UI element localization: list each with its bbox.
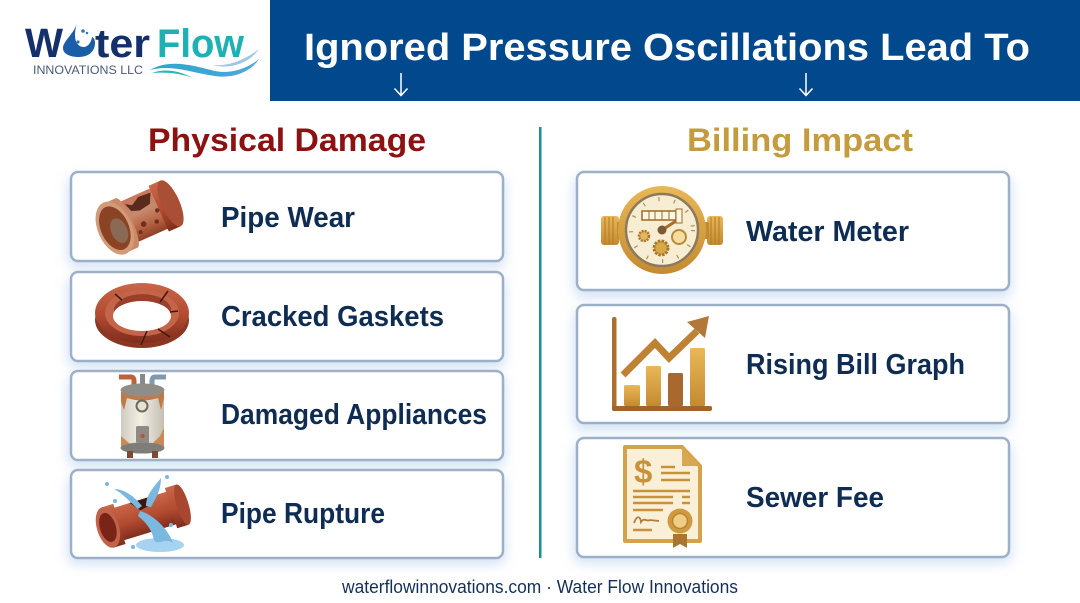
label: Rising Bill Graph: Rising Bill Graph [746,349,965,381]
header banner [270,0,1080,101]
footer: waterflowinnovations.com · Water Flow Innovations [341,577,738,597]
heading: Physical Damage: Physical Damage [148,122,426,158]
logo: Water Flow Innovations LLC [25,20,259,78]
card: Rising Bill Graph [574,305,1011,430]
panel: billing impact [574,172,1011,563]
card: Pipe Rupture [68,470,505,564]
logo: Water Flow Innovations LLC: Flow [157,22,245,66]
logo waves [150,49,259,78]
icon: sewer fee document [625,447,700,548]
label: Sewer Fee: Sewer Fee [746,482,884,514]
arrow: to billing impact [800,73,812,96]
label: Damaged Appliances: Damaged Appliances [221,399,487,431]
panel: physical damage [68,172,505,564]
card: Water Meter [574,172,1011,297]
title: Ignored Pressure Oscillations Lead To [304,27,1030,69]
label: Pipe Rupture: Pipe Rupture [221,498,385,530]
card: Damaged Appliances [68,371,505,466]
card: Pipe Wear [68,172,505,267]
card: Cracked Gaskets [68,272,505,367]
card: Sewer Fee [574,438,1011,563]
icon: cracked gasket [95,283,189,348]
heading: Billing Impact: Billing Impact [687,122,913,158]
icon: sewer fee document: $ [634,453,652,490]
icon: water meter [601,186,723,274]
arrow: to physical damage [394,73,408,96]
icon: corroded pipe [88,174,190,261]
icon: rising bar graph [612,316,712,411]
label: Pipe Wear: Pipe Wear [221,202,355,234]
center divider [539,127,542,558]
logo: Water Flow Innovations LLC: W [25,20,63,66]
label: Cracked Gaskets: Cracked Gaskets [221,301,444,333]
logo: Water Flow Innovations LLC: ter [95,22,150,66]
logo: Water Flow Innovations LLC: INNOVATIONS LLC [33,63,143,77]
icon: ruptured pipe [91,475,194,552]
icon: rusty water heater [119,374,166,458]
label: Water Meter: Water Meter [746,216,909,248]
icon: water drop in logo [63,23,95,57]
